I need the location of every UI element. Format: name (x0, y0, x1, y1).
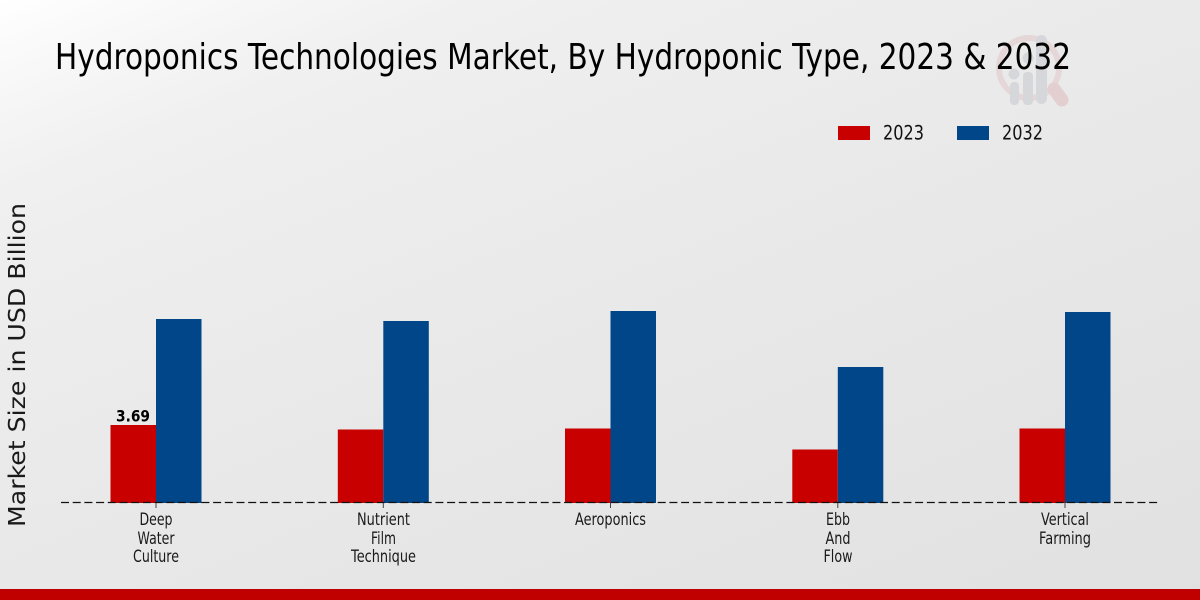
category label: Ebb And Flow: Flow (824, 547, 852, 566)
y axis label: Market Size in USD Billion (5, 203, 31, 527)
bars: Ebb And Flow (792, 367, 883, 503)
category label: Nutrient Film Technique: Technique (350, 547, 416, 566)
category label: Deep Water Culture: Deep (140, 510, 172, 529)
category label: Ebb And Flow: Ebb (826, 510, 850, 529)
legend (838, 122, 1043, 144)
category label: Deep Water Culture: Culture (133, 547, 179, 566)
category label: Aeroponics: Aeroponics (575, 510, 646, 529)
icon: watermark logo magnifier with bars (999, 35, 1062, 105)
category label: Nutrient Film Technique: Film (371, 529, 396, 548)
data label: 3.69: 3.69 (116, 406, 150, 426)
category label: Ebb And Flow: And (826, 529, 850, 548)
baseline (61, 502, 1159, 504)
category label: Nutrient Film Technique (350, 510, 416, 566)
category label: Vertical Farming: Farming (1039, 529, 1091, 548)
category label: Deep Water Culture (133, 510, 179, 566)
bars: Nutrient Film Technique (338, 321, 429, 503)
bars: Aeroponics (565, 311, 656, 503)
footer bar (0, 589, 1200, 600)
category label: Vertical Farming (1039, 510, 1091, 548)
category label: Deep Water Culture: Water (138, 529, 175, 548)
bar chart (61, 311, 1159, 566)
legend item: 2023 (838, 122, 924, 144)
bars: Vertical Farming (1020, 312, 1110, 503)
legend item: 2032 (957, 122, 1043, 144)
category label: Vertical Farming: Vertical (1041, 510, 1089, 529)
category label: Ebb And Flow (824, 510, 852, 566)
legend item: 2032: 2032 (1002, 122, 1043, 144)
legend item: 2023: 2023 (883, 122, 924, 144)
category label: Nutrient Film Technique: Nutrient (357, 510, 410, 529)
bars: Deep Water Culture (110, 319, 202, 503)
